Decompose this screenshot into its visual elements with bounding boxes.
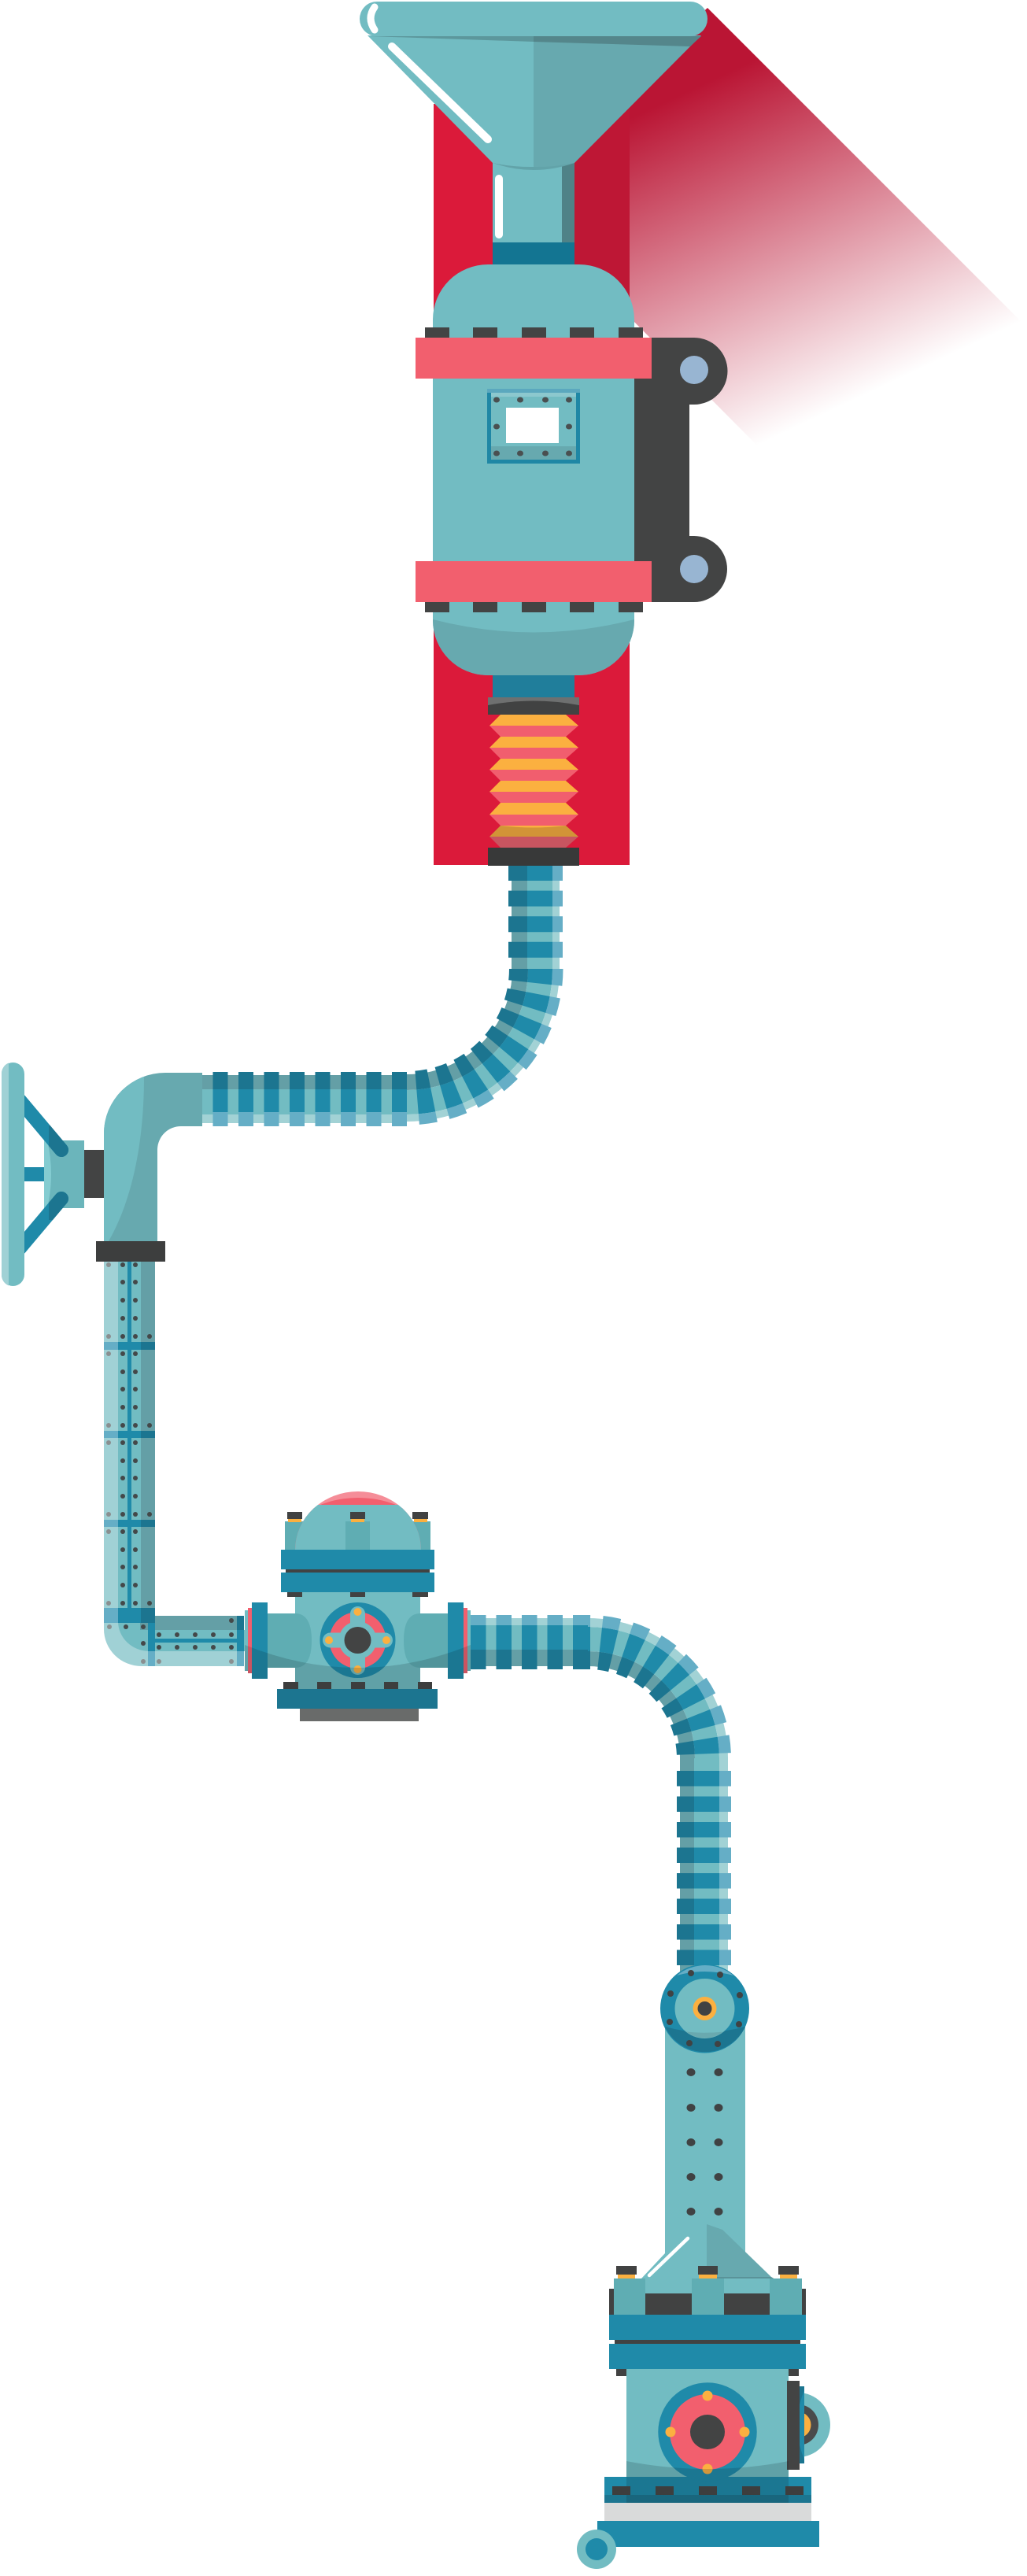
pump base bolts xyxy=(612,2486,803,2495)
dark hose coupling xyxy=(488,848,579,866)
base ring xyxy=(577,2530,616,2569)
riveted vertical pipe xyxy=(104,1261,245,1666)
valve hub xyxy=(320,1602,395,1678)
pump side port xyxy=(766,2386,830,2463)
lower vertical column xyxy=(641,2015,775,2279)
main tank body xyxy=(433,264,634,675)
valve dome xyxy=(285,1491,430,1550)
funnel xyxy=(360,2,707,170)
bottom pump xyxy=(577,2266,830,2569)
valve base plate xyxy=(277,1682,438,1721)
lower collar xyxy=(488,675,579,715)
inspection window xyxy=(487,389,580,464)
red backdrop panel xyxy=(434,104,630,865)
valve lower shading xyxy=(245,1645,471,1692)
valve body xyxy=(245,1592,471,1690)
bracket with two lugs xyxy=(634,338,727,602)
upper elbow pipe xyxy=(104,1073,202,1241)
strap bolts xyxy=(425,327,643,612)
side port bar xyxy=(787,2381,800,2470)
round pipe flange xyxy=(660,1964,749,2053)
pump hub xyxy=(658,2382,757,2482)
pump base plate xyxy=(597,2477,819,2547)
black pipe flange xyxy=(96,1241,165,1262)
long cast shadow xyxy=(630,8,1027,453)
shadow on red backdrop xyxy=(574,79,630,317)
hand wheel valve xyxy=(2,1063,104,1286)
pump upper block xyxy=(609,2278,806,2315)
neck pipe below funnel xyxy=(493,163,574,264)
upper ribbed hose xyxy=(202,865,560,1123)
valve top bolts xyxy=(287,1512,428,1522)
valve flanges xyxy=(281,1550,434,1597)
pink straps xyxy=(416,338,652,602)
bellows spring xyxy=(489,715,578,848)
middle valve xyxy=(245,1491,471,1721)
lower ribbed hose xyxy=(471,1618,728,1975)
pump body xyxy=(626,2369,789,2477)
pump top bolts xyxy=(616,2266,799,2278)
pump lower shading xyxy=(626,2461,789,2503)
pump flanges xyxy=(609,2315,806,2376)
